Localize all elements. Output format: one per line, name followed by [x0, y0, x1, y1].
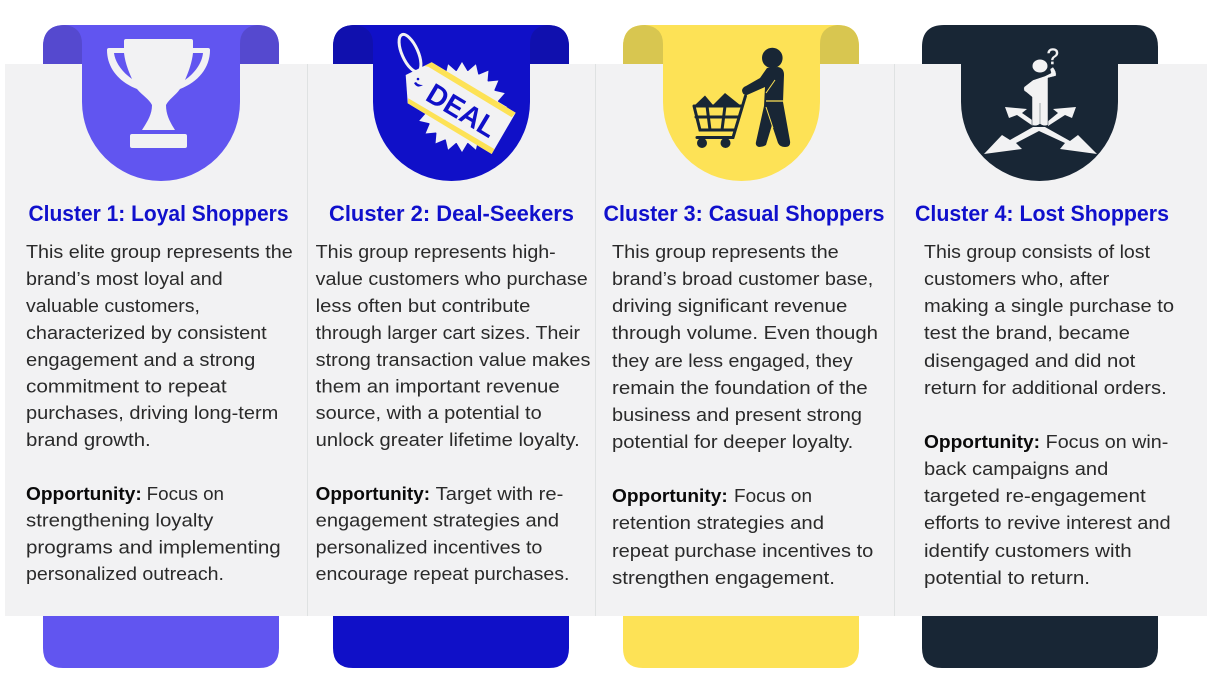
text block: cluster 4: disengaged and did not [924, 350, 1135, 371]
text block: cluster 4: This group consists of lost [924, 241, 1150, 262]
text block: cluster 2: source, with a potential to [316, 402, 542, 423]
bottom tab: cluster 2 [333, 616, 569, 668]
text block: cluster 3: they are less engaged, they [612, 350, 853, 371]
text block: cluster 1: commitment to repeat [26, 376, 227, 396]
heading: cluster 3: Cluster 3: Casual Shoppers [604, 201, 884, 226]
text block: cluster 1: purchases, driving long-term [26, 402, 278, 423]
badge: cluster 4 [922, 25, 1158, 181]
icon: trophy [107, 39, 210, 148]
text block: cluster 4: targeted re-engagement [924, 485, 1146, 506]
text block: cluster 1: strengthening loyalty [26, 510, 214, 530]
text block: cluster 3: This group represents the [612, 241, 839, 262]
text block: cluster 1: brand’s most loyal and [26, 268, 223, 289]
icon: shopper with cart [694, 48, 790, 148]
heading: cluster 4: Cluster 4: Lost Shoppers [915, 201, 1169, 226]
badge: cluster 3 [623, 25, 859, 181]
text block: cluster 1: brand growth. [26, 429, 151, 450]
text block: cluster 2: engagement strategies and [316, 510, 559, 530]
text block: cluster 1: characterized by consistent [26, 322, 267, 343]
text block: cluster 2: strong transaction value makes [316, 349, 590, 370]
text block: cluster 2: encourage repeat purchases. [316, 563, 569, 584]
text block: cluster 4: customers who, after [924, 268, 1109, 289]
text block: cluster 4: Opportunity: [924, 431, 1040, 452]
bottom tab: cluster 3 [623, 616, 859, 668]
text block: cluster 3: driving significant revenue [612, 295, 847, 316]
text block: cluster 4: potential to return. [924, 567, 1090, 588]
text block: cluster 2 [316, 241, 590, 584]
text block: cluster 4: identify customers with [924, 540, 1132, 561]
text block: cluster 3: Opportunity: [612, 485, 728, 506]
text block: cluster 2: unlock greater lifetime loyalty. [316, 429, 580, 450]
panel: background [5, 64, 1207, 616]
heading: cluster 1: Cluster 1: Loyal Shoppers [28, 201, 288, 226]
text block: cluster 2: Target with re- [436, 483, 563, 504]
text block: cluster 3: Focus on [734, 485, 812, 506]
text block: cluster 1: This elite group represents the [26, 241, 293, 262]
text block: cluster 3: brand’s broad customer base, [612, 268, 873, 289]
text block: cluster 3: potential for deeper loyalty. [612, 431, 853, 452]
text block: cluster 4: making a single purchase to [924, 295, 1174, 316]
text block: cluster 1: personalized outreach. [26, 563, 224, 584]
icon: deal tag [395, 31, 516, 154]
text block: cluster 1: Opportunity: [26, 483, 142, 504]
text block: cluster 3: retention strategies and [612, 512, 824, 533]
icon: lost person at crossroads [984, 44, 1097, 154]
text block: cluster 1 [26, 241, 293, 584]
badge: cluster 2 [333, 25, 569, 181]
text block: cluster 3: business and present strong [612, 404, 862, 425]
text block: cluster 1: Focus on [147, 483, 224, 504]
text block: cluster 4: test the brand, became [924, 322, 1130, 343]
heading: cluster 2: Cluster 2: Deal-Seekers [329, 201, 574, 226]
text block: cluster 4: Focus on win- [1046, 431, 1168, 452]
text block: cluster 3: strengthen engagement. [612, 567, 835, 588]
bottom tab: cluster 4 [922, 616, 1158, 668]
text block: cluster 2: value customers who purchase [316, 268, 588, 289]
text block: cluster 4: efforts to revive interest and [924, 512, 1171, 533]
text block: cluster 3: remain the foundation of the [612, 377, 868, 398]
text block: cluster 3: repeat purchase incentives to [612, 540, 873, 561]
text block: cluster 2: personalized incentives to [316, 536, 542, 558]
text block: cluster 4: return for additional orders. [924, 377, 1167, 398]
text block: cluster 4 [924, 241, 1174, 588]
text block: cluster 2: them an important revenue [316, 376, 560, 396]
text block: cluster 2: less often but contribute [316, 295, 530, 316]
text block: cluster 1: engagement and a strong [26, 349, 255, 370]
icon: lost person at crossroads: ? [1047, 44, 1059, 69]
bottom tab: cluster 1 [43, 616, 279, 668]
icon: deal tag: DEAL [420, 78, 502, 144]
badge: cluster 1 [43, 25, 279, 181]
text block: cluster 2: Opportunity: [316, 483, 430, 504]
text block: cluster 2: This group represents high- [316, 241, 556, 262]
text block: cluster 2: through larger cart sizes. Their [316, 322, 580, 343]
text block: cluster 3: through volume. Even though [612, 322, 878, 343]
text block: cluster 1: programs and implementing [26, 536, 281, 558]
text block: cluster 4: back campaigns and [924, 458, 1108, 479]
text block: cluster 1: valuable customers, [26, 295, 200, 316]
text block: cluster 3 [612, 241, 878, 588]
